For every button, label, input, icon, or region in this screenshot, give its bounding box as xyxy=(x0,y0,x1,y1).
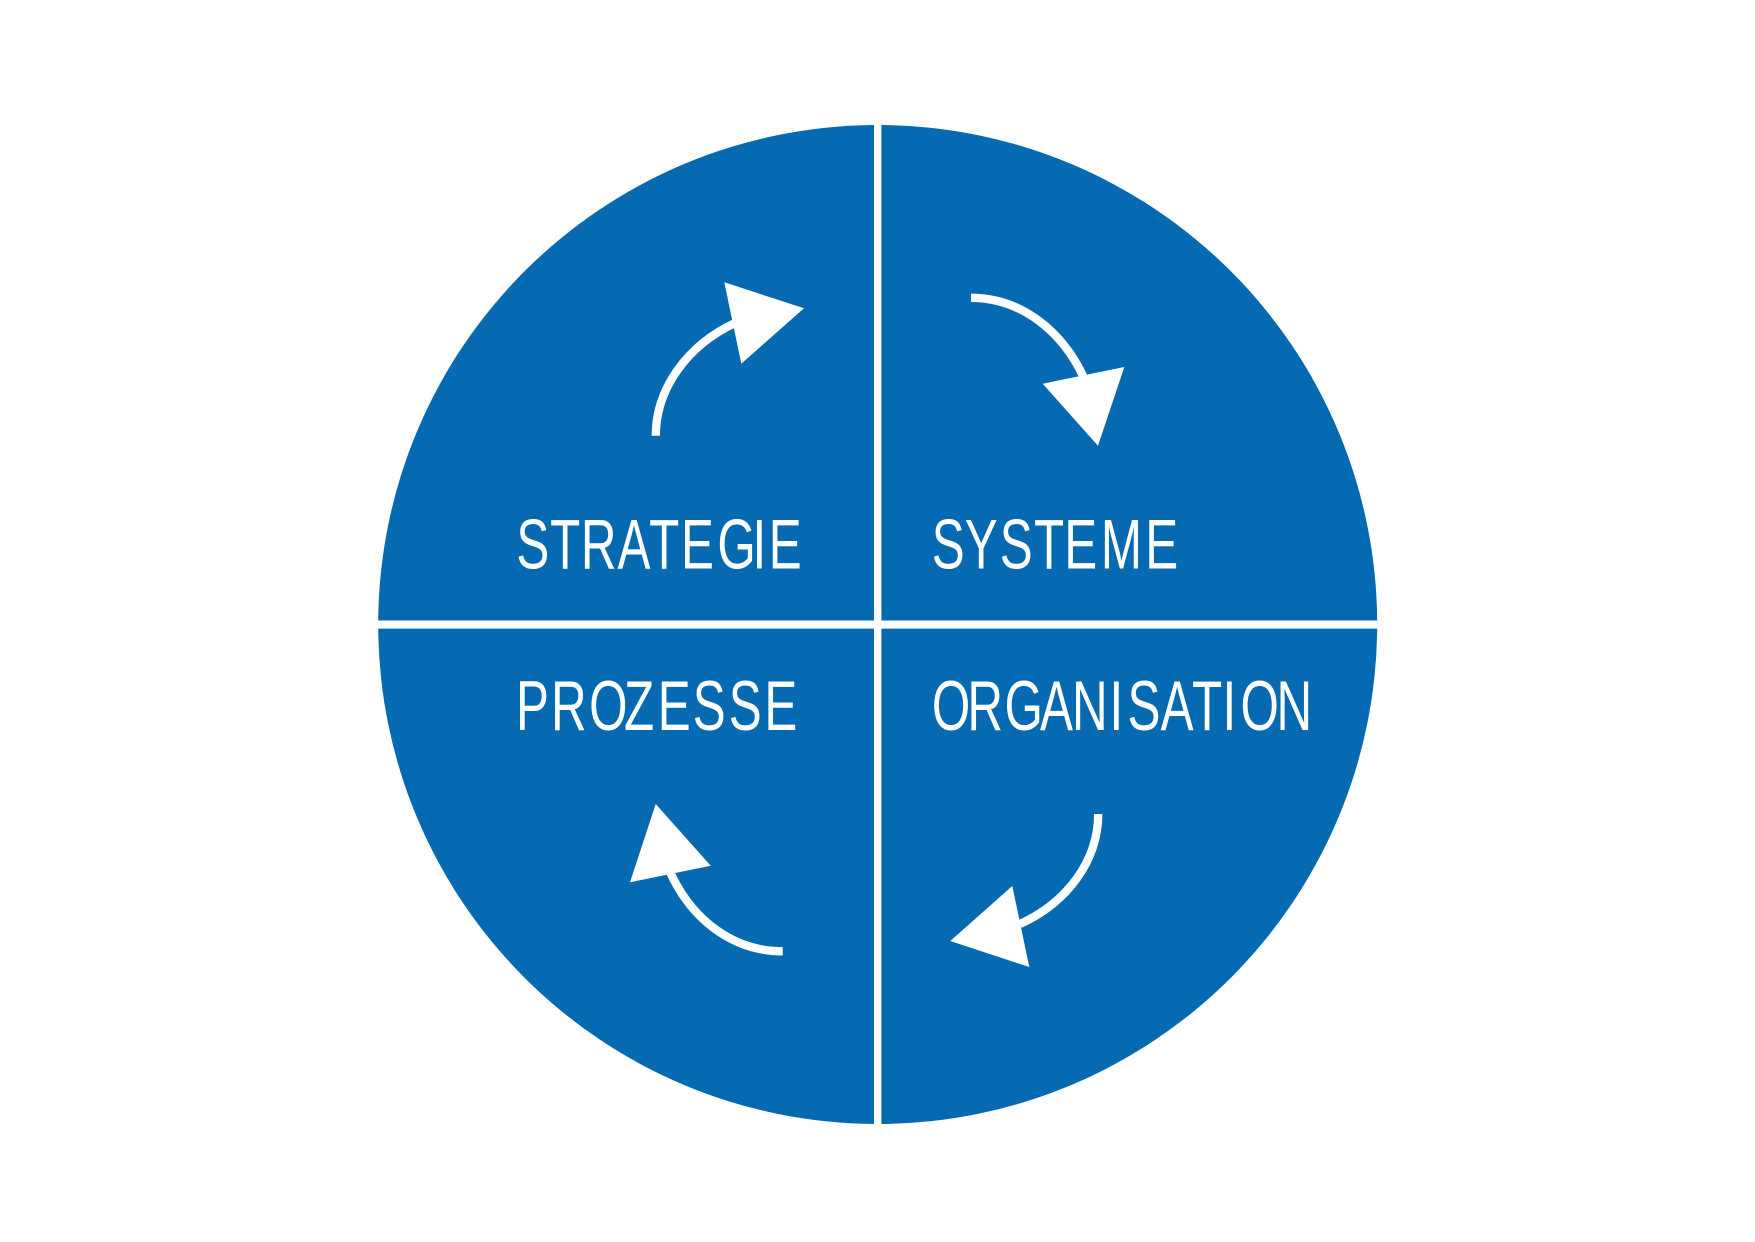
quadrant background: bottom right xyxy=(881,629,1377,1124)
quadrant background: top right xyxy=(881,125,1377,620)
icon: curved arrow up right xyxy=(656,282,804,436)
icon: curved arrow down left xyxy=(950,814,1098,967)
label: Prozesse: PROZESSE xyxy=(516,666,797,745)
label: Strategie: STRATEGIE xyxy=(516,505,802,583)
label: Organisation: ORGANISATION xyxy=(932,666,1312,745)
label: Systeme: SYSTEME xyxy=(932,505,1178,583)
panel: Prozesse quadrant xyxy=(378,629,874,1124)
quadrant background: bottom left xyxy=(378,629,874,1124)
panel: Organisation quadrant xyxy=(881,629,1377,1124)
icon: curved arrow down right xyxy=(971,298,1124,446)
quadrant background: top left xyxy=(378,125,874,620)
icon: curved arrow up left xyxy=(630,804,783,951)
panel: Strategie quadrant xyxy=(378,125,874,620)
panel: Systeme quadrant xyxy=(881,125,1377,620)
